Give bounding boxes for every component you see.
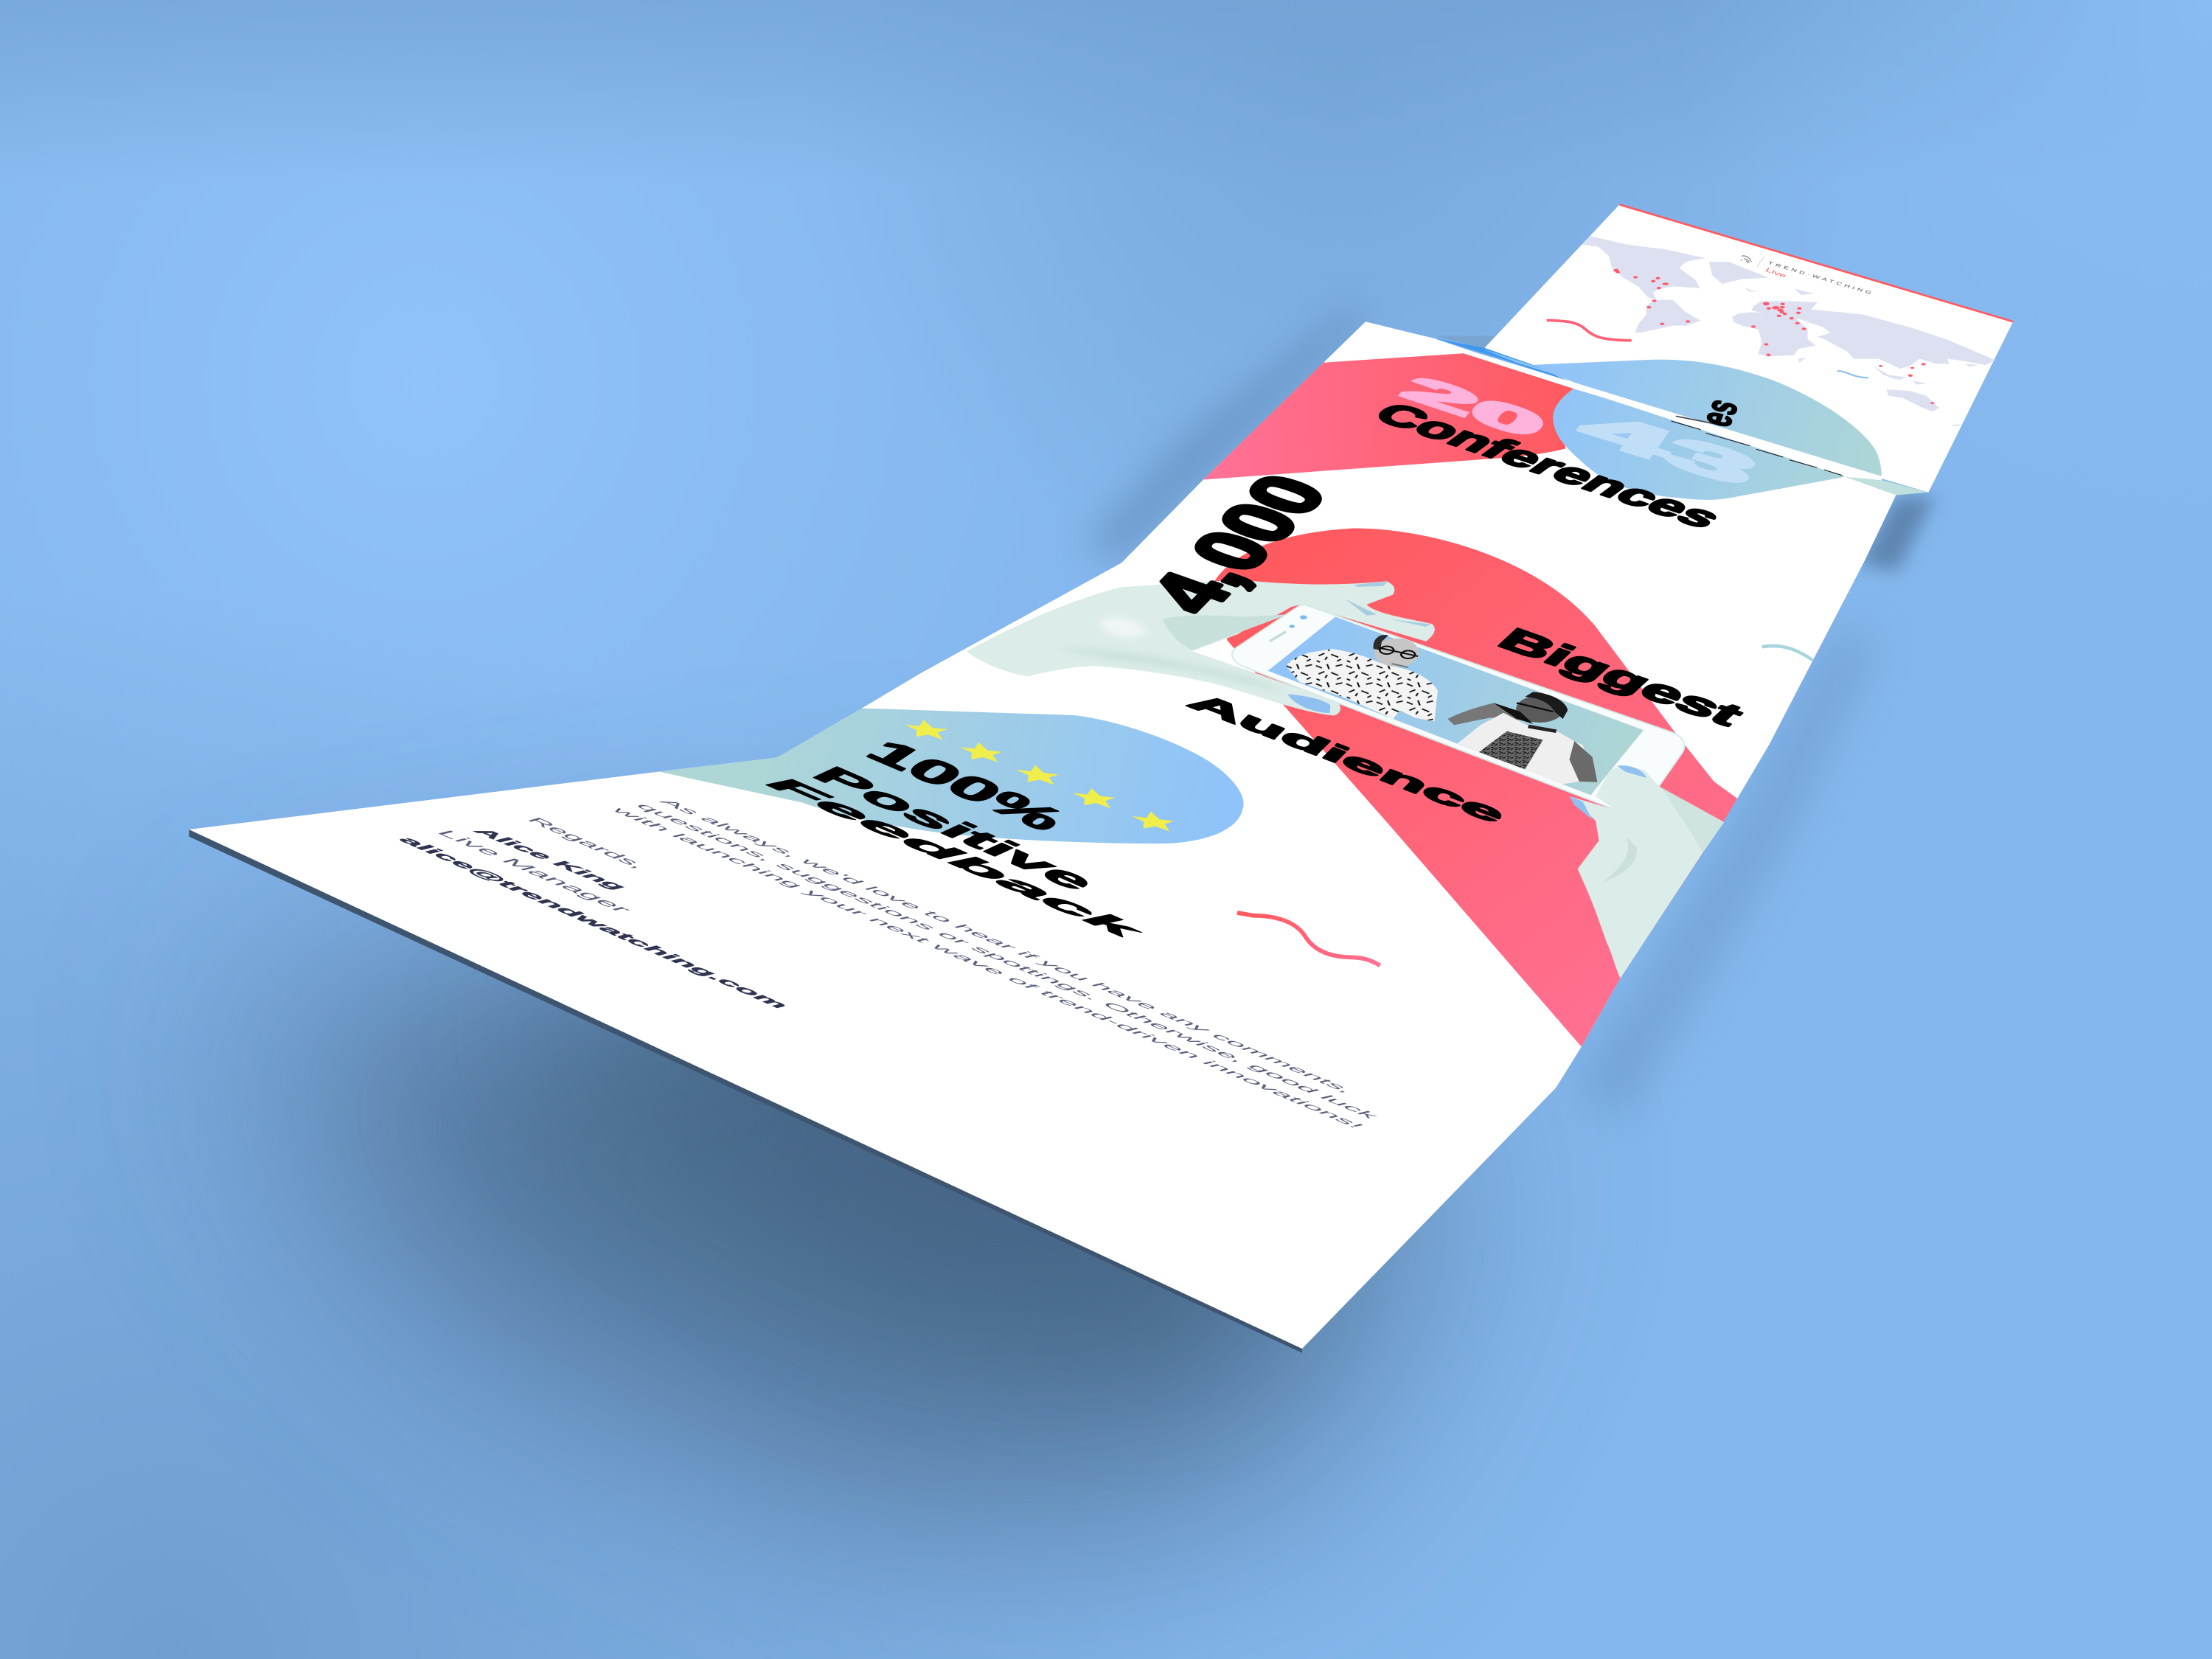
signature xyxy=(394,815,795,1009)
city markers xyxy=(1613,269,1934,404)
shape: top blob above fold xyxy=(1531,360,1882,480)
signature: Alice King xyxy=(469,827,633,891)
person one xyxy=(1287,635,1438,721)
people on screen xyxy=(1287,635,1597,784)
heading: 100%: 100% xyxy=(855,734,1077,838)
heading: Feedback: Feedback xyxy=(754,776,1156,939)
right hand xyxy=(1569,765,1724,978)
closing paragraph xyxy=(608,799,1383,1130)
text: es: es xyxy=(1690,394,1747,431)
squiggle: teal right xyxy=(1762,646,1813,660)
squiggle: red xyxy=(1547,320,1632,341)
person two xyxy=(1447,692,1597,784)
shape: feedback blob xyxy=(658,708,1244,844)
panel: main sheet xyxy=(189,321,1896,1349)
shape: big red arch xyxy=(1211,529,1737,1047)
phone screen xyxy=(1268,616,1644,795)
number: 43: 43 xyxy=(1570,402,1768,495)
heading: Conferences: Conferences xyxy=(1364,397,1733,534)
world map xyxy=(1582,236,1995,426)
heading: Positive: Positive xyxy=(802,762,1107,895)
heading: 4,000: 4,000 xyxy=(1130,465,1347,624)
signature: Regards, xyxy=(523,815,652,870)
sheet shadow xyxy=(240,303,1935,1509)
illustration: hands holding phone xyxy=(967,580,1724,978)
left hand xyxy=(967,580,1435,716)
signature: alice@trendwatching.com xyxy=(394,835,795,1009)
heading: Biggest: Biggest xyxy=(1489,622,1753,732)
fold crease xyxy=(1435,338,1927,495)
logo: TREND·WATCHING xyxy=(1767,260,1872,295)
signature: Live Manager xyxy=(432,829,636,914)
phone body xyxy=(1232,605,1684,810)
red top edge line xyxy=(1619,204,2013,321)
squiggle: blue xyxy=(1837,371,1868,378)
panel: map panel at the top xyxy=(1484,204,2013,493)
shape: pink banner xyxy=(1203,353,1576,480)
heading: Audience: Audience xyxy=(1181,688,1513,828)
rating stars xyxy=(902,717,1178,832)
shape: blue blob with 43 xyxy=(1553,388,1846,500)
logo: Live xyxy=(1764,266,1788,279)
number: 20: 20 xyxy=(1394,369,1555,445)
squiggle: red lower xyxy=(1237,913,1380,965)
paper edge thickness xyxy=(189,830,1302,1353)
